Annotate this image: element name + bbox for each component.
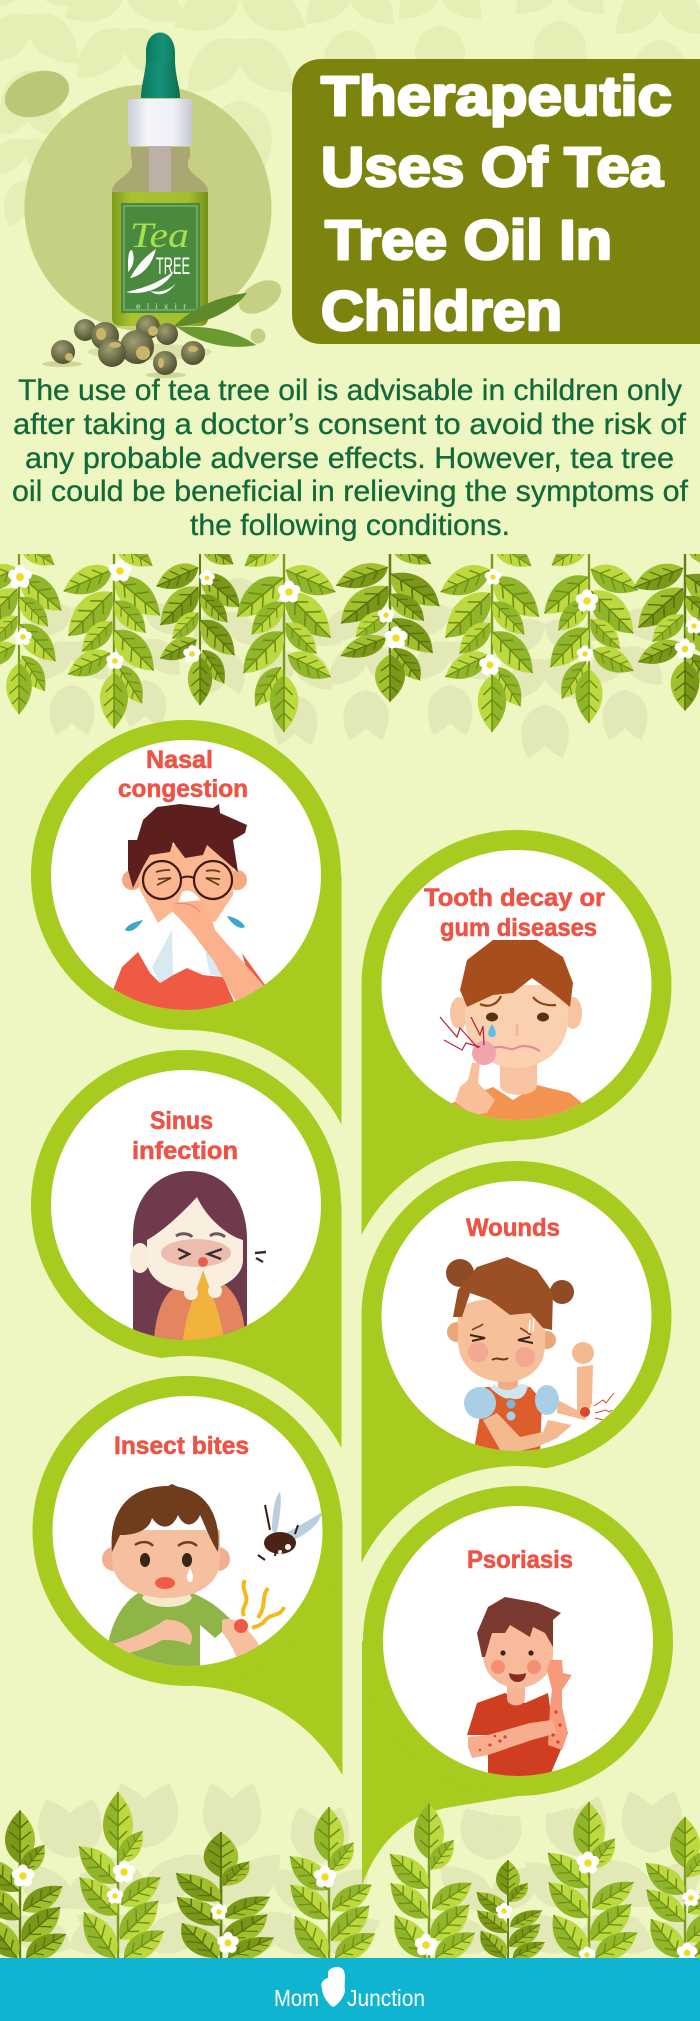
heading: nasal congestion: congestion xyxy=(118,775,248,803)
label text: Tea xyxy=(130,215,189,255)
dropper bulb xyxy=(146,32,180,98)
intro paragraph: the following conditions. xyxy=(190,509,510,542)
intro paragraph: oil could be beneficial in relieving the symptoms of xyxy=(12,475,689,508)
oil body xyxy=(112,192,208,326)
bubble: wounds xyxy=(362,1161,672,1816)
bottle illustration xyxy=(0,32,287,378)
heading: tooth decay or gum diseases: Tooth decay or xyxy=(424,884,605,912)
label text xyxy=(130,215,190,311)
label text: elixir xyxy=(136,302,186,311)
heading: psoriasis: Psoriasis xyxy=(467,1546,573,1574)
heading: sinus infection xyxy=(132,1107,238,1165)
bubble: tooth decay or gum diseases xyxy=(362,830,672,1235)
olive leaves xyxy=(173,293,247,327)
intro paragraph xyxy=(12,374,689,542)
logo text: Mom xyxy=(274,1985,319,2011)
pipette xyxy=(149,146,171,206)
heading: nasal congestion: Nasal xyxy=(146,746,213,774)
illustration: girl with sinus pain xyxy=(130,1171,266,1340)
bubble: nasal congestion xyxy=(31,720,342,1125)
mosquito xyxy=(258,1492,322,1560)
illustration: boy with psoriasis xyxy=(467,1597,572,1780)
bubble: insect bites xyxy=(32,1376,342,1775)
intro paragraph: after taking a doctor’s consent to avoid the risk of xyxy=(13,408,687,441)
bottom plants xyxy=(0,1792,700,1968)
label xyxy=(121,203,200,313)
heading: sinus infection: Sinus xyxy=(150,1107,213,1135)
leaf shadows behind hanging leaves xyxy=(19,571,678,763)
blobs xyxy=(0,63,75,125)
footer band xyxy=(0,1958,700,2021)
heading: nasal congestion xyxy=(118,746,248,803)
heading: sinus infection: infection xyxy=(132,1137,238,1165)
backdrop circle xyxy=(24,84,272,332)
flowers xyxy=(8,559,700,675)
heading: tooth decay or gum diseases xyxy=(424,884,605,942)
logo icon xyxy=(321,1967,345,2007)
heading: tooth decay or gum diseases: gum diseases xyxy=(440,914,597,942)
title panel: Tree Oil In xyxy=(325,208,612,271)
illustration: girl with wound xyxy=(446,1257,614,1455)
hanging leaves band xyxy=(0,554,700,732)
sprays xyxy=(0,554,700,732)
glass neck and shoulder xyxy=(112,147,208,200)
seeds xyxy=(42,315,212,378)
bite waves xyxy=(243,1580,284,1628)
faint leaf pattern xyxy=(0,0,700,231)
intro paragraph: any probable adverse effects. However, tea tree xyxy=(25,442,674,475)
title text: Therapeutic xyxy=(321,64,672,127)
title panel xyxy=(292,59,700,344)
heading: wounds: Wounds xyxy=(466,1214,560,1242)
plant flowers xyxy=(12,1851,700,1963)
plant shadows behind bottom plants xyxy=(0,1777,700,1964)
label text: TREE xyxy=(156,253,190,280)
illustration: boy with insect bite xyxy=(102,1484,322,1670)
bubble: sinus infection xyxy=(31,1050,342,1448)
title panel: Children xyxy=(321,279,562,342)
heading: insect bites: Insect bites xyxy=(114,1432,249,1460)
intro paragraph: The use of tea tree oil is advisable in children only xyxy=(18,374,682,407)
logo text: Junction xyxy=(347,1985,425,2011)
illustration: boy sneezing xyxy=(113,804,265,1015)
title panel: Uses Of Tea xyxy=(321,135,664,198)
illustration: boy with toothache xyxy=(440,940,582,1130)
label sprig xyxy=(126,249,176,294)
logo text xyxy=(274,1985,425,2011)
plants xyxy=(0,1792,700,1968)
bubble: psoriasis xyxy=(362,1486,673,1885)
cap xyxy=(128,99,192,146)
